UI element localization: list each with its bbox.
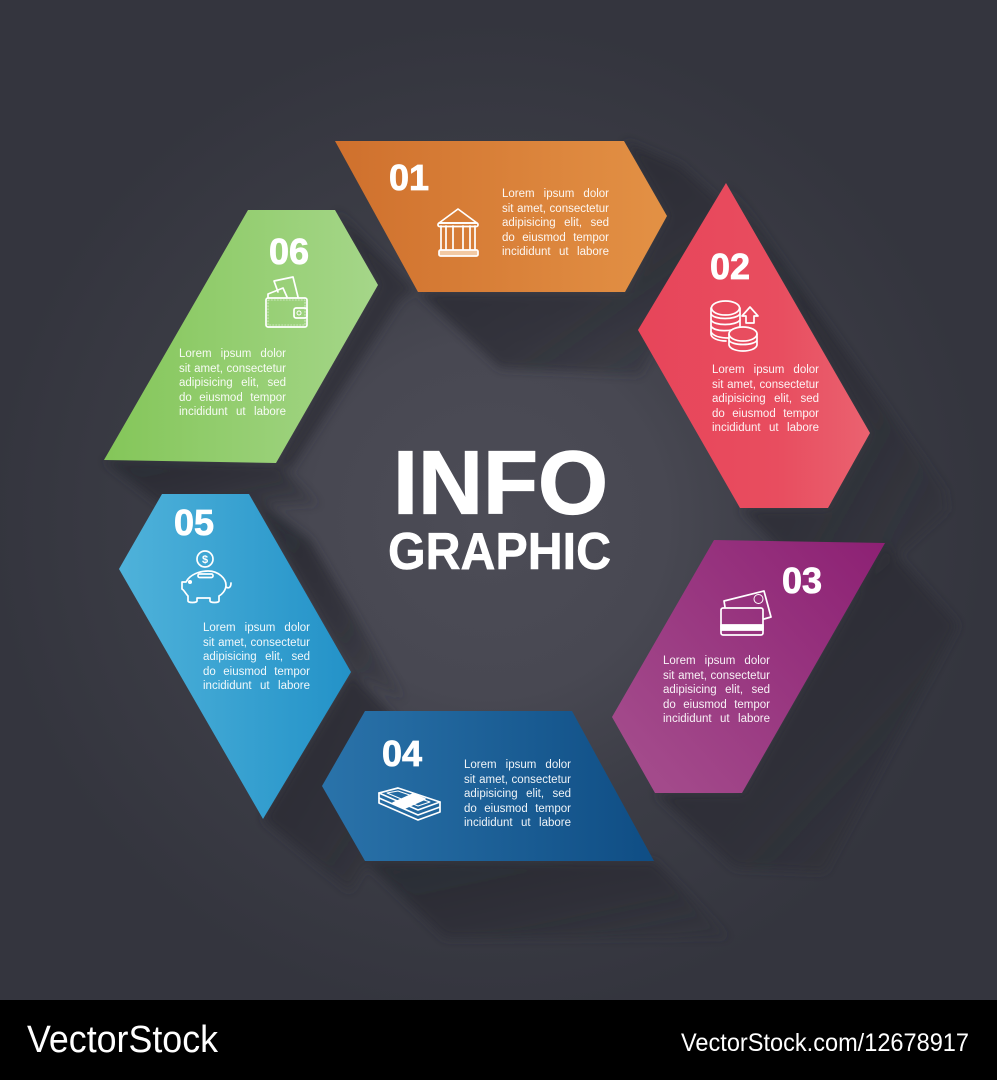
text block 02: Lorem ipsum dolor — [712, 364, 819, 376]
text block 05: Lorem ipsum dolor — [203, 622, 310, 634]
text block 06: incididunt ut labore — [179, 406, 286, 418]
number 06: 06 — [269, 231, 309, 272]
number 03: 03 — [782, 560, 822, 601]
number 01: 01 — [389, 157, 429, 198]
panel 03 — [612, 540, 885, 793]
panel 04 — [322, 711, 654, 861]
text block 04: Lorem ipsum dolor — [464, 759, 571, 771]
text block 05: incididunt ut labore — [203, 680, 310, 692]
text block 03: sit amet, consectetur — [663, 670, 770, 682]
text block 04: sit amet, consectetur — [464, 774, 571, 786]
text block 03: incididunt ut labore — [663, 713, 770, 725]
text block 04 — [464, 758, 571, 831]
text block 06: sit amet, consectetur — [179, 362, 286, 374]
title: INFO — [393, 434, 608, 534]
text block 06: do eiusmod tempor — [179, 392, 286, 404]
text block 02: sit amet, consectetur — [712, 378, 819, 390]
text block 03: adipisicing elit, sed — [663, 684, 770, 696]
text block 03: do eiusmod tempor — [663, 698, 770, 710]
text block 02 — [712, 363, 819, 436]
text block 05: do eiusmod tempor — [203, 666, 310, 678]
icon: credit cards — [721, 591, 771, 635]
footer url: VectorStock.com/12678917 — [681, 1029, 969, 1057]
text block 04: adipisicing elit, sed — [464, 788, 571, 800]
text block 01 — [502, 187, 609, 260]
panel 05 — [119, 494, 351, 819]
text block 06: Lorem ipsum dolor — [179, 348, 286, 360]
icon: piggy bank: $ — [202, 554, 208, 566]
text block 04: incididunt ut labore — [464, 817, 571, 829]
text block 02: adipisicing elit, sed — [712, 393, 819, 405]
long shadows — [104, 141, 958, 938]
icon: wallet — [266, 277, 307, 327]
text block 03 — [663, 654, 770, 727]
text block 02: do eiusmod tempor — [712, 408, 819, 420]
text block 05: sit amet, consectetur — [203, 636, 310, 648]
text block 05 — [203, 621, 310, 694]
text block 06 — [179, 347, 286, 420]
number 02: 02 — [710, 246, 750, 287]
text block 01: adipisicing elit, sed — [502, 217, 609, 229]
title: GRAPHIC — [388, 523, 611, 581]
text block 01: sit amet, consectetur — [502, 202, 609, 214]
icon: piggy bank — [182, 551, 231, 602]
icon: money stack — [379, 788, 440, 820]
number 05: 05 — [174, 502, 214, 543]
text block 01: incididunt ut labore — [502, 246, 609, 258]
footer bar — [0, 1000, 997, 1080]
number 04: 04 — [382, 733, 422, 774]
text block 05: adipisicing elit, sed — [203, 651, 310, 663]
icon: coins with arrow — [711, 301, 758, 351]
text block 06: adipisicing elit, sed — [179, 377, 286, 389]
title — [388, 434, 611, 581]
text block 04: do eiusmod tempor — [464, 802, 571, 814]
panel 02 — [638, 183, 870, 508]
text block 02: incididunt ut labore — [712, 422, 819, 434]
text block 01: do eiusmod tempor — [502, 232, 609, 244]
text block 01: Lorem ipsum dolor — [502, 188, 609, 200]
panel 01 — [335, 141, 667, 292]
footer logo: VectorStock — [27, 1019, 219, 1061]
icon: bank — [438, 209, 478, 256]
text block 03: Lorem ipsum dolor — [663, 655, 770, 667]
panel 06 — [104, 210, 378, 463]
